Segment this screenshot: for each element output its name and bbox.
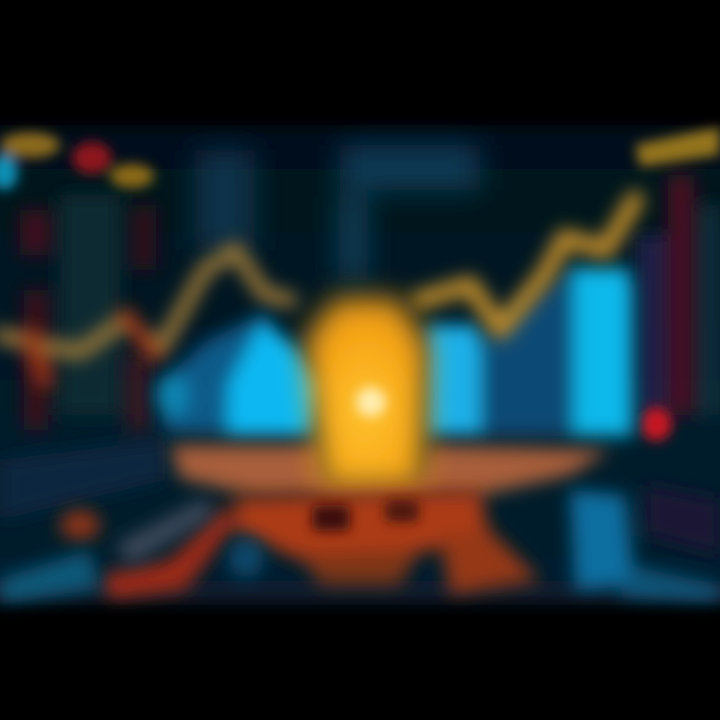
right top label [635,126,720,167]
left blue bar cluster [156,312,322,436]
dark windows [312,500,419,531]
central glow [304,298,428,488]
scene backdrop [0,125,720,605]
lower orange structures [60,490,540,600]
upper background bars [195,145,480,280]
right blue bar cluster [426,265,635,436]
lower dark and blue shapes [0,485,720,605]
red dot [640,407,672,441]
left cyan spot and top labels [0,132,154,190]
left panel bars [0,195,165,520]
glow core [356,387,386,417]
right zigzag line [420,200,635,330]
table band [170,445,610,495]
left zigzag line [0,250,290,380]
right tall red bars [638,175,720,415]
